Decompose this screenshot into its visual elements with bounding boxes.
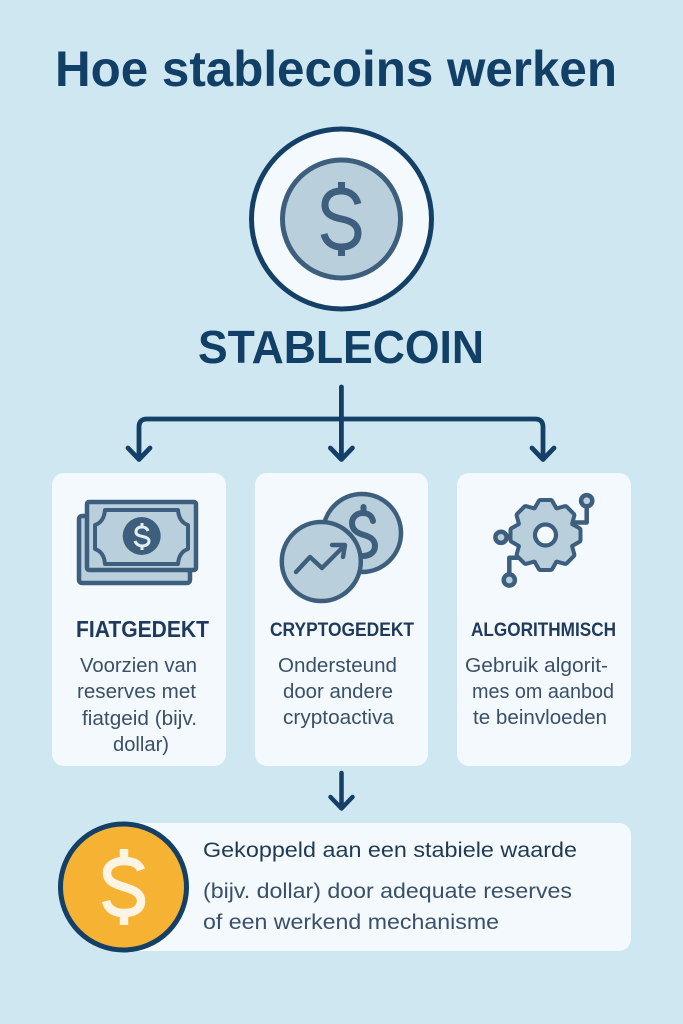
icon: banknotes xyxy=(79,502,196,583)
panel: algoritmisch xyxy=(457,473,631,766)
text: cryptogedekt description: cryptoactiva xyxy=(283,707,395,729)
icon: gold dollar coin xyxy=(60,824,186,950)
panel: fiatgedekt xyxy=(52,473,226,766)
text: result description: of een werkend mechanisme xyxy=(203,910,499,934)
text: result description: (bijv. dollar) door adequate reserves xyxy=(203,879,572,903)
icon: crypto coins xyxy=(282,494,401,601)
text: cryptogedekt description xyxy=(278,655,397,729)
icon: main stablecoin coin xyxy=(252,129,432,309)
arrows: branching to three types xyxy=(128,387,554,460)
heading: algoritmisch: ALGORITHMISCH xyxy=(471,619,616,641)
heading: fiatgedekt: FIATGEDEKT xyxy=(76,616,210,642)
text: cryptogedekt description: Ondersteund xyxy=(278,655,397,677)
arrow: to result xyxy=(330,773,352,808)
text: cryptogedekt description: door andere xyxy=(283,681,393,703)
heading: cryptogedekt: CRYPTOGEDEKT xyxy=(270,619,414,641)
text: algoritmisch description: Gebruik algorit- xyxy=(465,655,608,677)
text: algoritmisch description: mes om aanbod xyxy=(472,681,614,703)
text: result description xyxy=(203,879,572,934)
text: result heading: Gekoppeld aan een stabiele waarde xyxy=(203,838,577,862)
text: algoritmisch description: te beinvloeden xyxy=(473,707,607,729)
heading: stablecoin: STABLECOIN xyxy=(198,321,484,373)
icon: gear with nodes xyxy=(495,495,592,586)
text: fiatgedekt description: fiatgeid (bijv. xyxy=(82,708,197,730)
title: Hoe stablecoins werken xyxy=(55,41,617,97)
text: fiatgedekt description: Voorzien van xyxy=(80,655,197,677)
panel: cryptogedekt xyxy=(255,473,428,766)
text: fiatgedekt description: reserves met xyxy=(77,681,196,703)
text: fiatgedekt description xyxy=(77,655,197,756)
panel: result xyxy=(60,823,631,951)
text: algoritmisch description xyxy=(465,655,614,729)
text: fiatgedekt description: dollar) xyxy=(113,734,169,756)
